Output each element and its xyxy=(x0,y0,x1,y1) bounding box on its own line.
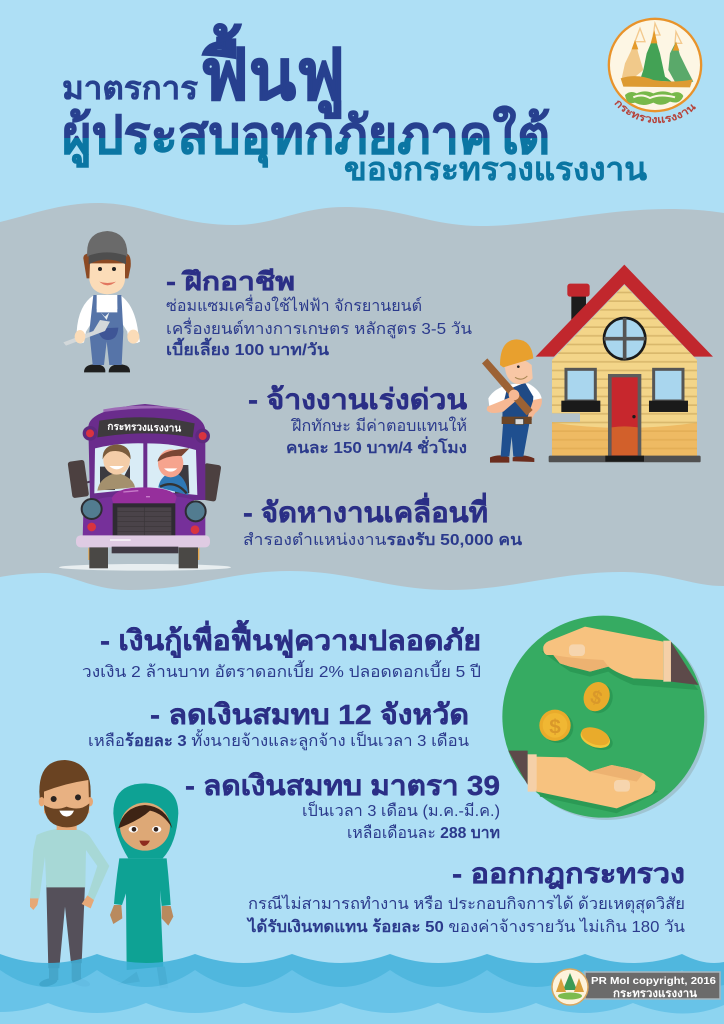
logo caption: กระทรวงแรงงาน xyxy=(614,100,696,124)
heading: urgent hiring: - จ้างงานเร่งด่วน xyxy=(248,384,467,415)
title line 3: ของกระทรวงแรงงาน xyxy=(344,151,647,187)
footer text bar xyxy=(585,972,720,1000)
icon: flooded house xyxy=(536,265,713,462)
footer seal xyxy=(552,969,588,1005)
logo: ministry of labour seal xyxy=(608,18,702,124)
text: contributions detail: เหลือร้อยละ 3 ทั้งนายจ้างและลูกจ้าง เป็นเวลา 3 เดือน xyxy=(88,729,469,751)
text: regulation detail: กรณีไม่สามารถทำงาน หรือ ประกอบกิจการได้ ด้วยเหตุสุดวิสัย xyxy=(248,894,685,914)
coins xyxy=(539,678,617,754)
chimney xyxy=(567,284,590,322)
text: section 39 detail: เป็นเวลา 3 เดือน (ม.ค.-มี.ค.) xyxy=(302,800,500,820)
icon: woman in teal dress standing in flood xyxy=(110,783,178,988)
left window xyxy=(561,369,600,412)
heading: safety recovery loan: - เงินกู้เพื่อฟื้นฟูความปลอดภัย xyxy=(100,619,481,658)
centre figure xyxy=(640,35,672,82)
right figure xyxy=(668,42,693,85)
heading: reduced contributions section 39: - ลดเงินสมทบ มาตรา 39 xyxy=(185,770,500,801)
text: regulation detail: ได้รับเงินทดแทน ร้อยละ 50 ของค่าจ้างรายวัน ไม่เกิน 180 วัน xyxy=(246,917,685,936)
text: urgent hiring detail xyxy=(286,416,467,457)
heading: reduced contributions 12 provinces: - ลดเงินสมทบ 12 จังหวัด xyxy=(150,699,469,730)
text: urgent hiring detail: คนละ 150 บาท/4 ชั่วโมง xyxy=(286,436,467,457)
footer: copyright badge xyxy=(552,969,720,1005)
heading: vocational training: - ฝึกอาชีพ xyxy=(166,268,295,296)
icon: builder xyxy=(482,339,542,463)
left figure xyxy=(622,40,643,78)
driver xyxy=(158,448,189,495)
text: training detail: เบี้ยเลี้ยง 100 บาท/วัน xyxy=(166,337,329,359)
text: loan detail: วงเงิน 2 ล้านบาท อัตราดอกเบี้ย 2% ปลอดดอกเบี้ย 5 ปี xyxy=(82,660,481,681)
footer text bar: กระทรวงแรงงาน xyxy=(613,988,697,1000)
bus destination sign: กระทรวงแรงงาน xyxy=(107,422,182,435)
icon: purple mobile job bus xyxy=(59,404,231,571)
water: flood waves xyxy=(0,954,724,1024)
title xyxy=(62,23,647,187)
footer text bar: PR MoI copyright, 2016 xyxy=(591,975,716,987)
icon: hands and coins circle xyxy=(502,616,707,820)
lower hand xyxy=(508,751,655,808)
passenger xyxy=(97,444,135,491)
heading: mobile job placement: - จัดหางานเคลื่อนที่ xyxy=(243,492,488,528)
text: section 39 detail xyxy=(302,800,500,842)
text: regulation detail xyxy=(246,894,685,936)
icon: man standing in flood xyxy=(30,760,109,988)
text: training detail: เครื่องยนต์ทางการเกษตร หลักสูตร 3-5 วัน xyxy=(166,317,472,339)
upper hand xyxy=(543,627,698,685)
icon: mechanic xyxy=(63,231,140,372)
title line 2 two tone: ผู้ประสบอุทกภัยภาคใต้ xyxy=(62,105,550,168)
panel: grey job measures band xyxy=(0,203,724,590)
title line 1 large: ฟื้นฟู xyxy=(200,23,345,119)
right window xyxy=(649,369,688,412)
text: training detail: ซ่อมแซมเครื่องใช้ไฟฟ้า จักรยานยนต์ xyxy=(166,294,422,315)
roof xyxy=(536,265,713,357)
round window xyxy=(604,318,645,359)
coins: $ xyxy=(587,687,605,710)
heading: ministerial regulation: - ออกกฎกระทรวง xyxy=(452,858,685,890)
bus destination sign xyxy=(97,417,195,437)
coins: $ xyxy=(549,715,561,738)
text: section 39 detail: เหลือเดือนละ 288 บาท xyxy=(347,824,500,842)
title line 1 small: มาตรการ xyxy=(62,70,198,106)
text: urgent hiring detail: ฝึกทักษะ มีค่าตอบแทนให้ xyxy=(291,416,467,435)
door xyxy=(608,374,641,456)
text: mobile job detail: สำรองตำแหน่งงาน รองรับ 50,000 คน xyxy=(243,531,522,549)
text: training detail xyxy=(166,294,472,359)
